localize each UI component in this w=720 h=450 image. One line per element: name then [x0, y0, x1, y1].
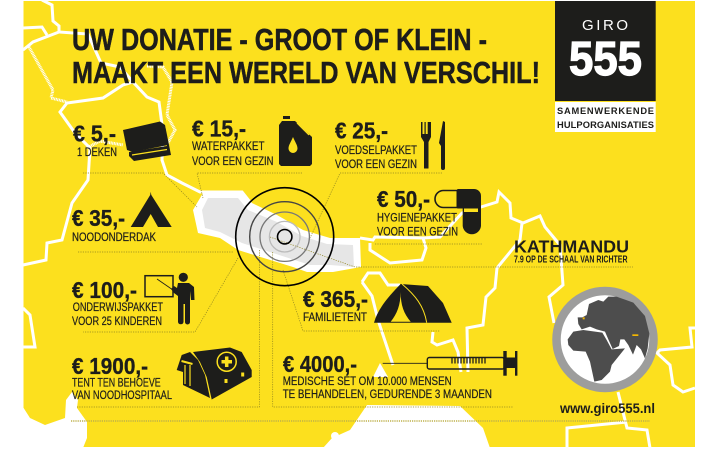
- earthquake epicentre rings: [236, 188, 334, 286]
- item: emergency shelter 35 euro: NOODONDERDAK: [72, 230, 157, 244]
- Kathmandu label: KATHMANDU: [514, 237, 629, 257]
- item: hygiene package 50 euro: € 50,-: [377, 186, 430, 212]
- title: MAAKT EEN WERELD VAN VERSCHIL!: [72, 55, 540, 90]
- item: hospital tent 1900 euro: TENT TEN BEHOEVE: [72, 376, 161, 390]
- map: Nepal highlighted: [193, 192, 361, 272]
- item: hospital tent 1900 euro: VAN NOODHOSPITAAL: [72, 388, 172, 402]
- item: hospital tent 1900 euro: € 1900,-: [72, 353, 148, 379]
- item: water package 15 euro: [192, 116, 312, 168]
- item: education package 100 euro: € 100,-: [72, 277, 137, 303]
- item: blanket 5 euro: 1 DEKEN: [77, 145, 117, 159]
- item: food package 25 euro: VOOR EEN GEZIN: [335, 157, 417, 171]
- icon: teacher at board: [145, 273, 194, 324]
- icon: large tent: [374, 284, 452, 323]
- item: medical set 4000 euro: [283, 351, 517, 401]
- item: emergency shelter 35 euro: € 35,-: [72, 205, 125, 231]
- icon: pill capsule: [435, 189, 481, 234]
- logo: Giro 555: [555, 1, 656, 132]
- item: blanket 5 euro: € 5,-: [73, 120, 116, 146]
- item: water package 15 euro: € 15,-: [192, 116, 246, 142]
- icon: fork and knife: [421, 121, 445, 170]
- item: education package 100 euro: ONDERWIJSPAKKET: [73, 300, 163, 314]
- item: medical set 4000 euro: MEDISCHE SET OM 10.000 MENSEN: [283, 374, 452, 388]
- item: hygiene package 50 euro: [377, 186, 481, 239]
- item: hospital tent 1900 euro: [72, 348, 252, 402]
- website url: www.giro555.nl: [559, 400, 655, 416]
- globe: [556, 291, 654, 388]
- item: food package 25 euro: € 25,-: [335, 118, 388, 144]
- item: education package 100 euro: [72, 273, 194, 328]
- icon: syringe: [383, 351, 517, 376]
- map: sea areas: [20, 363, 490, 448]
- item: blanket 5 euro: [73, 120, 171, 161]
- item: education package 100 euro: VOOR 25 KINDEREN: [72, 314, 162, 328]
- item: water package 15 euro: WATERPAKKET: [192, 139, 265, 153]
- item: hygiene package 50 euro: VOOR EEN GEZIN: [377, 225, 458, 239]
- title: [72, 22, 540, 90]
- title: UW DONATIE - GROOT OF KLEIN -: [72, 22, 487, 57]
- item: hygiene package 50 euro: HYGIENEPAKKET: [377, 211, 457, 225]
- item: family tent 365 euro: [303, 284, 452, 324]
- logo: Giro 555: 555: [569, 33, 642, 86]
- logo: Giro 555: GIRO: [582, 17, 628, 34]
- item: food package 25 euro: [335, 118, 445, 171]
- bottom dotted line: [71, 420, 650, 422]
- item: medical set 4000 euro: € 4000,-: [283, 351, 357, 377]
- icon: folded blanket: [123, 122, 171, 161]
- item: food package 25 euro: VOEDSELPAKKET: [335, 143, 417, 157]
- icon: jerry can: [279, 116, 312, 166]
- item: water package 15 euro: VOOR EEN GEZIN: [192, 154, 274, 168]
- logo: Giro 555: HULPORGANISATIES: [557, 120, 654, 130]
- item: family tent 365 euro: FAMILIETENT: [303, 310, 367, 324]
- Kathmandu label: 7.9 OP DE SCHAAL VAN RICHTER: [514, 255, 628, 266]
- item: emergency shelter 35 euro: [72, 192, 172, 244]
- item: family tent 365 euro: € 365,-: [303, 286, 368, 312]
- map: disputed dashed borders: [29, 47, 175, 148]
- icon: small tent: [131, 192, 172, 227]
- dotted connector lines: [77, 173, 633, 407]
- item: medical set 4000 euro: TE BEHANDELEN, GEDURENDE 3 MAANDEN: [283, 387, 492, 401]
- icon: hospital tent: [177, 348, 252, 400]
- logo: Giro 555: SAMENWERKENDE: [557, 106, 654, 116]
- Kathmandu label: [514, 237, 629, 266]
